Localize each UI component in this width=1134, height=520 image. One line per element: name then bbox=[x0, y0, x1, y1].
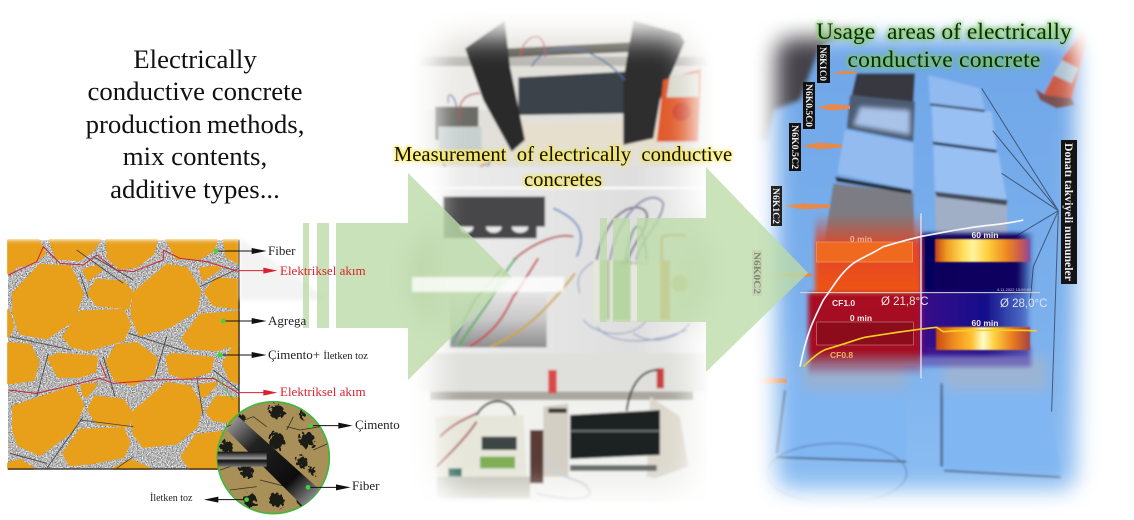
label arrow: current 1 bbox=[239, 268, 277, 274]
heading: measurement: Measurement of electrically conductive concretes bbox=[394, 144, 732, 191]
label texts: Çimento bbox=[355, 417, 400, 432]
heading: usage areas: Usage areas of electrically conductive concrete bbox=[816, 19, 1072, 73]
thermal readings: Ø 21,8°C bbox=[881, 296, 928, 308]
tag N6K0.5C2: N6K0.5C2 bbox=[789, 125, 799, 169]
photo: resistance test rig bbox=[426, 26, 702, 168]
arrow shadow bbox=[240, 238, 330, 300]
label arrow: fiber in circle bbox=[306, 484, 351, 490]
traffic cone bbox=[1035, 30, 1087, 108]
tag N6K1C2: N6K1C2 bbox=[770, 188, 780, 224]
photo: resistivity meter and cylinder bbox=[435, 400, 692, 495]
thermal readings: CF0.8 bbox=[830, 350, 853, 360]
label texts: Elektriksel akım bbox=[280, 384, 366, 399]
sample tags bbox=[751, 45, 1077, 296]
label arrow: fiber bbox=[214, 248, 267, 254]
tag faded bbox=[751, 250, 762, 296]
tag faded: N6K0C2 bbox=[751, 252, 761, 294]
panel: snow field test photograph bbox=[758, 21, 1092, 505]
label texts: Fiber bbox=[268, 243, 296, 258]
aggregate stones bbox=[8, 240, 239, 469]
tag N6K0.5C0: N6K0.5C0 bbox=[803, 84, 813, 127]
label texts: Elektriksel akım bbox=[280, 263, 366, 278]
label texts bbox=[150, 243, 400, 504]
thermal image panel bbox=[800, 213, 1040, 378]
thermal readings: CF1.0 bbox=[832, 298, 855, 308]
white band over arrow bbox=[412, 277, 564, 292]
diagram labels with arrows bbox=[204, 248, 353, 503]
fibers and electric current paths bbox=[8, 247, 239, 468]
panel: fiber magnified circle bbox=[217, 402, 329, 514]
thermal readings: 0 min bbox=[850, 313, 872, 323]
snow-covered slabs bbox=[767, 73, 1062, 503]
label arrow: current 2 bbox=[239, 390, 277, 396]
arrow: second large green arrow bbox=[600, 167, 808, 372]
label texts: Çimento+ İletken toz bbox=[268, 347, 368, 362]
label arrow: cement and powder bbox=[217, 352, 267, 358]
dark ground bbox=[759, 22, 855, 140]
label texts: Fiber bbox=[352, 478, 380, 493]
label texts: İletken toz bbox=[150, 492, 193, 504]
panel: measurement photographs bbox=[410, 13, 713, 502]
label arrow: aggregate bbox=[221, 318, 267, 324]
panel: concrete microstructure diagram bbox=[8, 240, 239, 469]
panel: measurement photographs: V6K0.5C2 0 bbox=[621, 260, 648, 266]
tag reinforced specimens: Donatı takviyeli numuneler bbox=[1062, 143, 1076, 282]
specimen pointer lines bbox=[982, 88, 1058, 412]
thermal readings bbox=[830, 230, 1047, 360]
photo: electrode and wiring setup bbox=[427, 166, 692, 354]
label arrow: conductive powder bbox=[204, 497, 249, 503]
soft photo halo behind arrows bbox=[410, 221, 710, 333]
thermal readings: 60 min bbox=[972, 230, 998, 240]
title: production methods: Electrically conductive concrete production methods, mix contents, additive types... bbox=[86, 44, 304, 204]
thermal readings: Ø 28,0°C bbox=[1000, 298, 1047, 310]
orange markers bbox=[753, 71, 857, 384]
thermal readings: 4.11.2022 15:09:53 bbox=[997, 287, 1032, 292]
thermal readings: 0 min bbox=[850, 234, 872, 244]
label texts: Agrega bbox=[268, 313, 306, 328]
arrow: first large green arrow bbox=[303, 173, 512, 380]
label arrow: cement bbox=[308, 423, 353, 429]
tag N6K1C0: N6K1C0 bbox=[817, 47, 827, 81]
thermal readings: 60 min bbox=[972, 318, 998, 328]
